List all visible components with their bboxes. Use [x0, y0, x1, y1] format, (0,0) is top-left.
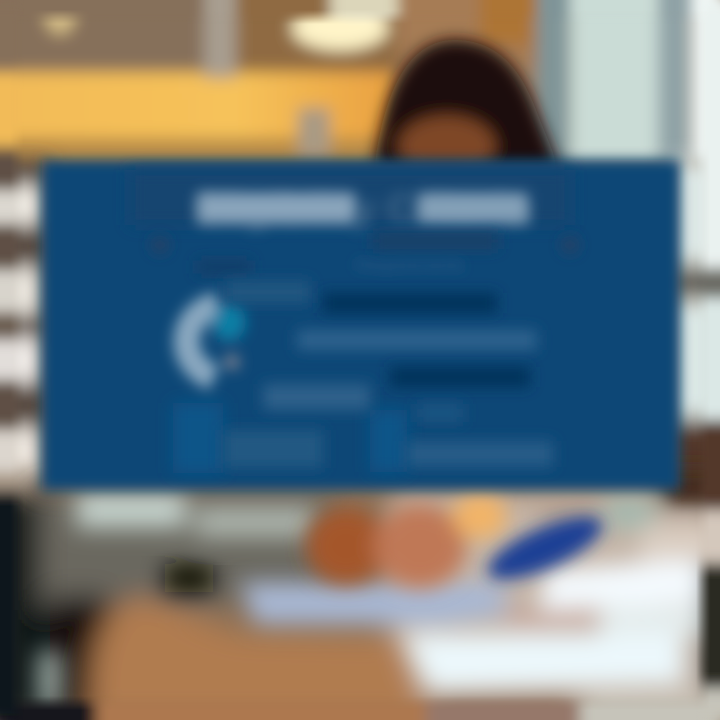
panel: blue card — [42, 160, 680, 490]
title: Eligibility Criteria — [194, 187, 530, 231]
icon: circular progress — [187, 303, 246, 378]
light text block: first criterion — [225, 281, 537, 350]
panel tonal variations — [130, 170, 570, 473]
background: left and right window strips — [0, 160, 720, 510]
subtitle: Requirements — [356, 257, 464, 274]
dark text line 2 — [390, 367, 530, 387]
background: upper cafe photo — [0, 0, 720, 168]
paper sheets on desk — [240, 470, 720, 690]
divider band and accents — [152, 233, 578, 274]
bottom text columns — [223, 430, 553, 468]
person: hair and face — [374, 40, 558, 176]
sweater highlights — [0, 472, 315, 710]
background: lower desk scene — [0, 490, 720, 720]
icon: pen — [480, 505, 610, 591]
hand holding pen — [306, 493, 507, 588]
panel background — [42, 160, 680, 490]
title heavy band — [198, 193, 528, 223]
light text block: second criterion — [263, 384, 463, 422]
dark text line — [323, 293, 497, 313]
